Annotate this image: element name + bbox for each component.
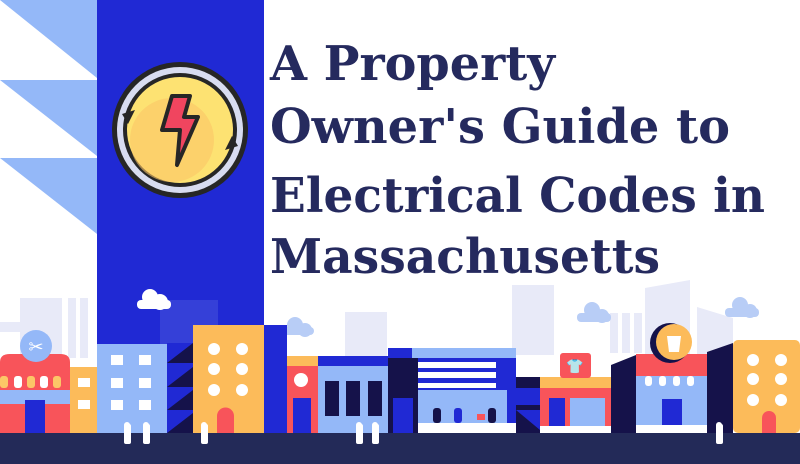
orange right building: [733, 340, 800, 433]
left triangle pattern: [0, 0, 97, 234]
blue column: [97, 0, 264, 345]
title: Owner's Guide to: [270, 99, 730, 155]
dark building: [611, 355, 636, 433]
dark building 2: [707, 343, 733, 433]
street buildings: [0, 323, 800, 434]
background pale skyline: [0, 280, 733, 358]
orange small: [70, 367, 97, 433]
title: Massachusetts: [270, 229, 660, 285]
red shop: [287, 356, 318, 433]
orange building: [193, 325, 264, 433]
title: [269, 36, 765, 285]
scissor shop: [0, 372, 70, 434]
triangle building 2: [516, 377, 540, 433]
ground street: [0, 433, 800, 464]
cafe building: [388, 348, 516, 433]
icon: lightning bolt in circle: [112, 62, 248, 198]
cup shop: [636, 354, 707, 433]
title: Electrical Codes in: [270, 168, 765, 224]
street buildings: 👕: [566, 359, 584, 375]
light blue building: [97, 344, 167, 433]
shirt shop: [540, 377, 611, 433]
pedestrians: [124, 422, 723, 444]
title: A Property: [269, 36, 557, 92]
clouds: [137, 289, 759, 337]
triangle building: [167, 343, 193, 433]
light blue shop: [318, 356, 388, 433]
street buildings: ✂: [28, 337, 44, 358]
